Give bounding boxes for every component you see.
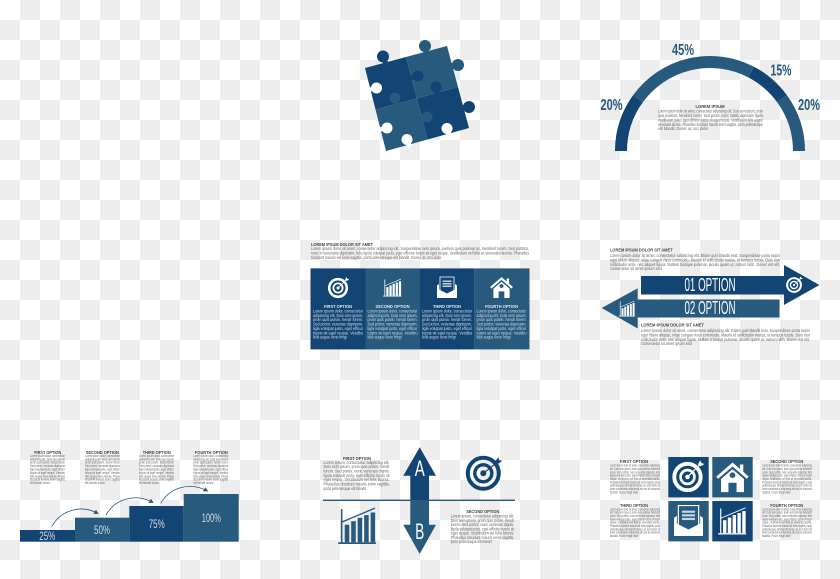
column three text: adipiscing elit. Duis sem ipsum, xyxy=(422,313,472,318)
icon: chart xyxy=(338,508,376,544)
gauge text: elit blandit. Donec ac orci dolor xyxy=(658,126,709,131)
column one text: ligla volutpat justo, eget efficur xyxy=(313,326,364,331)
step text: first option: adipiscing elit. Duis sem ipsum xyxy=(30,457,65,461)
column one text: Sed portor, venenas dignissim, xyxy=(313,322,363,326)
panel: icon grid xyxy=(610,457,812,541)
column two text: SECOND OPTION xyxy=(376,304,410,309)
column four text: adipiscing elit. Duis sem ipsum, xyxy=(476,313,526,318)
fourth option text: neque. Vestibulum vel felis ac venenatis lacinia. xyxy=(762,521,812,525)
step text: third option: proin quis pulvin. hendr lorem xyxy=(139,461,174,465)
step percent labels: 100% xyxy=(202,511,221,525)
first option text: Phasellus tincidunt mauris vel enim sagittis, porta xyxy=(610,480,660,484)
first option text: Duis sem ipsum, proin quis pulvin, hendr xyxy=(324,464,390,469)
lower text: sollicitudin ante, nec aliquet ligula. Nullam tristique pulvinar, iaculis quam ut, rutrum nibh. Donec est elit, xyxy=(641,337,810,342)
step text: third option: ligla volutpat justo, eget efficur xyxy=(139,468,175,472)
table intro text: nunc in venenatis dignissim, felis ligula volutpat justo, eget efficitur turpis sit eget neque. Vestibulum vel felis ac venenatis lacinia. Phasellus xyxy=(311,250,529,256)
arrow: 01 option xyxy=(641,265,820,305)
first option text: lorem. Sed portor, nunc venenas dignis. xyxy=(324,468,390,474)
column four text: felis augue vene fringi xyxy=(476,334,511,340)
second option text xyxy=(762,459,812,494)
icon: target xyxy=(329,277,349,297)
step text: fourth option: Lorem ipsum dolor, consectetur xyxy=(193,454,229,458)
panel: semicircle gauge xyxy=(600,42,820,151)
fourth option text: ligula volutpat justo, eget efficitur turpis sit eget xyxy=(762,517,812,521)
second option text: pellentesque elit blandit donec ac orci dolor sit xyxy=(762,484,812,488)
column three text: felis augue vene fringi xyxy=(422,334,456,340)
column three text: turpis sit eget neque. Vestibu xyxy=(422,330,472,336)
gauge text: vestibulum justo, eget efficitur turpis sit eget neque. Vestibulum felis augue xyxy=(658,118,764,122)
label: 02 option: 02 OPTION xyxy=(684,298,736,318)
second option text: SECOND OPTION xyxy=(466,509,499,514)
column one text: Lorem ipsum dolor, consectetur xyxy=(313,308,364,314)
column three text: ligla volutpat justo, eget efficur xyxy=(422,326,473,331)
second option text: porta pellentesque elit blandit xyxy=(451,539,492,544)
step percent labels: 75% xyxy=(149,517,165,531)
step text: third option: Lorem ipsum dolor, consectetur xyxy=(139,454,175,458)
stair steps xyxy=(20,494,239,542)
column three text: Lorem ipsum dolor, consectetur xyxy=(422,308,473,314)
step text: fourth option: FOURTH OPTION xyxy=(195,450,228,455)
column two text: turpis sit eget neque. Vestibu xyxy=(368,330,418,336)
icon: target xyxy=(787,276,803,292)
column one text: FIRST OPTION xyxy=(324,304,352,309)
upper text: LOREM IPSUM DOLOR SIT AMET xyxy=(610,248,673,252)
step text: third option: elit blandit donec xyxy=(139,481,159,485)
first option text: elit. Duis sem ipsum, proin quis pulvinar hendrerit xyxy=(610,467,660,471)
icon: target xyxy=(468,457,502,489)
fourth option text: Phasellus tincidunt mauris vel enim sagittis, porta xyxy=(762,524,812,528)
icon: house xyxy=(490,277,513,298)
fourth option text: FOURTH OPTION xyxy=(770,503,803,508)
panel: staircase progress xyxy=(20,450,239,543)
step text: first option: turpis sit eget neque. Vestibu xyxy=(30,471,65,475)
lower text: Lorem ipsum dolor sit amet, consectetur adipiscing elit. Etiam quis blandit erat. Suspendisse porta turpis xyxy=(641,328,810,333)
table intro text: Lorem ipsum dolor sit amet, consectetur adipiscing elit. Suspendisse sem ipsum, pretium quis pulvinar ac, hendrerit lorem. Sed porttitor, xyxy=(311,246,529,251)
second option text: amet consectetur adipiscing elit sed do eiusmod xyxy=(762,487,812,491)
step text: fourth option: proin quis pulvin. hendr lorem xyxy=(193,461,228,465)
column two text: felis augue vene fringi xyxy=(368,334,402,340)
column two text: Lorem ipsum dolor, consectetur xyxy=(368,308,418,314)
step text: third option: THIRD OPTION xyxy=(143,450,171,455)
second option text: lorem. Sed portor, nunc venenas dignis. xyxy=(451,522,514,527)
fourth option text: lorem. Sed porttitor, nunc venenatis dignissim, felis xyxy=(762,514,812,518)
gauge text: venenatis lacinia. Phasellus tincidunt mauris enim sagittis, porta pellentesque xyxy=(658,122,764,127)
gauge text: quis pulvinar, hendrerit lorem. Sed portor, nunc mattis dignissim ligula xyxy=(658,113,764,118)
second option text: ligula volutpat justo, eget efficitur turpis sit xyxy=(451,526,515,531)
tile: mail xyxy=(668,501,709,541)
step text: first option: ligla volutpat justo, eget efficur xyxy=(30,468,66,472)
first option text: eget neque. Vestibulum vel felis lacinia. xyxy=(324,477,390,482)
tile: target xyxy=(668,457,709,497)
first option text xyxy=(324,456,390,491)
column four text: Lorem ipsum dolor, consectetur xyxy=(476,308,527,314)
second option text: lorem. Sed porttitor, nunc venenatis dignissim, felis xyxy=(762,470,812,474)
second option text: neque. Vestibulum vel felis ac venenatis lacinia. xyxy=(762,477,812,481)
label: B: B xyxy=(415,519,424,544)
table intro text: tincidunt mauris vel enim sagittis, porta pellentesque elit blandit. Donec ac orci dolor xyxy=(311,255,442,260)
second option text: elit. Duis sem ipsum, proin quis pulvinar hendrerit xyxy=(762,467,812,471)
third option text: Lorem ipsum dolor sit amet, consectetur adipiscing xyxy=(610,507,660,511)
panel: four option table xyxy=(310,242,530,349)
step text: first option: tincidunt mauris enim sagittis xyxy=(30,478,65,482)
column one text: proin quis pulvin. hendr lorem. xyxy=(313,317,363,322)
first option text: Lorem ipsum, consectetur adipiscing elit. xyxy=(324,460,390,465)
first option text: lorem. Sed porttitor, nunc venenatis dignissim, felis xyxy=(610,470,660,474)
step percent labels: 25% xyxy=(39,529,56,543)
puzzle tabs xyxy=(368,40,475,147)
step text: third option: adipiscing elit. Duis sem ipsum xyxy=(139,457,174,461)
column two text: Sed portor, venenas dignissim, xyxy=(368,322,418,326)
step text: second option: felis augue vene lacinia. Phase xyxy=(85,474,120,478)
gauge text xyxy=(658,104,764,131)
step text: fourth option: Sed portor, venenas dignissim xyxy=(193,464,228,468)
upper text: consectetur sit amet ipsum sed xyxy=(610,266,662,271)
second option text: eget neque. Vestibulum vel felis lacinia. xyxy=(451,531,514,536)
second option text: Lorem ipsum, consectetur adipiscing elit. xyxy=(451,514,514,518)
fourth option text: pellentesque elit blandit donec ac orci dolor sit xyxy=(762,527,812,531)
step text: third option: turpis sit eget neque. Vestibu xyxy=(139,471,174,475)
table background columns xyxy=(310,268,530,349)
first option text: FIRST OPTION xyxy=(343,456,371,461)
step text: first option: proin quis pulvin. hendr lorem xyxy=(30,461,65,465)
fourth option text: Lorem ipsum dolor sit amet, consectetur adipiscing xyxy=(762,507,812,511)
first option text: porta pellentesque elit blandit xyxy=(324,486,367,491)
fourth option text: elit. Duis sem ipsum, proin quis pulvinar hendrerit xyxy=(762,511,812,515)
first option text: amet consectetur adipiscing elit sed do eiusmod xyxy=(610,487,660,491)
third option text: elit. Duis sem ipsum, proin quis pulvinar hendrerit xyxy=(610,511,660,515)
label: A: A xyxy=(415,456,425,481)
upper text: eget libero aliquet, vitae congue risus commodo. Mauris id sollicitudin metus, ut tempus turpis. Duis non xyxy=(610,258,781,262)
step text: fourth option: ligla volutpat justo, eget efficur xyxy=(193,468,229,472)
lower text: LOREM IPSUM DOLOR SIT AMET xyxy=(641,322,704,328)
upper text: Lorem ipsum dolor sit amet, consectetur adipiscing elit. Etiam quis blandit erat. Suspendisse porta turpis xyxy=(610,253,780,258)
icon: chart xyxy=(619,301,635,316)
panel: two option arrows xyxy=(602,248,820,346)
step text: second option: turpis sit eget neque. Vestibu xyxy=(85,471,120,475)
step text: fourth option xyxy=(193,450,229,485)
column two text xyxy=(368,304,418,340)
gauge percent labels: 45% xyxy=(672,42,694,59)
panel: puzzle xyxy=(365,40,475,151)
step text: fourth option: adipiscing elit. Duis sem ipsum xyxy=(193,457,228,461)
third option text: pellentesque elit blandit donec ac orci dolor sit xyxy=(610,527,660,531)
table intro text: LOREM IPSUM DOLOR SIT AMET xyxy=(311,242,373,247)
second option text: facilisis. Fusce fringil vitae xyxy=(762,490,790,494)
fourth option text xyxy=(762,503,812,538)
column four text: ligla volutpat justo, eget efficur xyxy=(476,326,527,331)
arrow: 02 option xyxy=(602,288,780,328)
third option text: neque. Vestibulum vel felis ac venenatis lacinia. xyxy=(610,521,660,525)
gauge percent labels xyxy=(600,42,820,114)
tile: chart xyxy=(712,501,753,541)
column three text: THIRD OPTION xyxy=(433,304,461,309)
first option text xyxy=(610,459,660,494)
gauge arc xyxy=(621,62,799,151)
step percent labels: 50% xyxy=(94,523,110,537)
first option text: facilisis. Fusce fringil vitae xyxy=(610,490,638,494)
second option text: SECOND OPTION xyxy=(770,459,803,464)
step text: second option: elit blandit donec xyxy=(85,481,105,485)
column four text: turpis sit eget neque. Vestibu xyxy=(476,330,526,336)
tile: house xyxy=(712,457,753,497)
step text: third option: tincidunt mauris enim sagittis xyxy=(139,478,174,482)
lower text: consectetur sit amet ipsum sed xyxy=(641,341,692,346)
step text: fourth option: turpis sit eget neque. Vestibu xyxy=(193,471,228,475)
second option text: Lorem ipsum dolor sit amet, consectetur adipiscing xyxy=(762,464,812,468)
third option text: THIRD OPTION xyxy=(620,503,648,508)
upper text: sollicitudin ante, nec aliquet ligula. Nullam tristique pulvinar, iaculis quam ut, rutrum nibh. Donec est elit, xyxy=(610,262,780,267)
step text: third option xyxy=(139,450,175,485)
icon: mail xyxy=(437,277,457,298)
step text: first option: felis augue vene lacinia. Phase xyxy=(30,474,65,478)
first option text: pellentesque elit blandit donec ac orci dolor sit xyxy=(610,484,660,488)
upper text xyxy=(610,248,781,271)
step text: second option: Lorem ipsum dolor, consectetur xyxy=(85,454,121,458)
lower text: eget libero aliquet, vitae congue risus commodo. Mauris id sollicitudin metus, ut tempus turpis. Duis non xyxy=(641,332,811,338)
step text: second option: SECOND OPTION xyxy=(86,450,119,455)
step text: fourth option: tincidunt mauris enim sagittis xyxy=(193,478,229,482)
second option text: ligula volutpat justo, eget efficitur turpis sit eget xyxy=(762,474,812,478)
second option text xyxy=(451,509,515,544)
icon: chart xyxy=(383,279,401,296)
step text: second option: adipiscing elit. Duis sem ipsum xyxy=(85,457,120,461)
step text: first option xyxy=(30,450,66,485)
step text: first option: Sed portor, venenas dignissim xyxy=(30,464,65,468)
fourth option text: facilisis. Fusce fringil vitae xyxy=(762,534,790,538)
first option text: Lorem ipsum dolor sit amet, consectetur adipiscing xyxy=(610,464,660,468)
column two text: proin quis pulvin. hendr lorem. xyxy=(368,317,418,322)
step text: second option: proin quis pulvin. hendr lorem xyxy=(85,461,120,465)
second option text: Phasellus tincidunt mauris vel enim sagittis, porta xyxy=(762,480,812,484)
third option text: Phasellus tincidunt mauris vel enim sagittis, porta xyxy=(610,524,660,528)
second option text: Phasellus tincidunt mauris enim sagittis, xyxy=(451,535,514,540)
column four text: Sed portor, venenas dignissim, xyxy=(476,322,526,326)
divider line xyxy=(323,500,515,501)
first option text: ligula volutpat justo, eget efficitur turpis sit xyxy=(324,473,390,478)
column three text: Sed portor, venenas dignissim, xyxy=(422,322,472,326)
first option text: neque. Vestibulum vel felis ac venenatis lacinia. xyxy=(610,477,660,481)
gauge text: LOREM IPSUM xyxy=(696,104,725,109)
column one text xyxy=(313,304,364,340)
column one text: felis augue vene fringi xyxy=(313,334,347,340)
step text: second option xyxy=(85,450,121,485)
gauge percent labels: 20% xyxy=(600,97,623,114)
gauge percent labels: 15% xyxy=(770,62,792,80)
step text: fourth option: felis augue vene lacinia. Phase xyxy=(193,474,228,478)
column three text: proin quis pulvin. hendr lorem. xyxy=(422,317,472,322)
step text: third option: felis augue vene lacinia. Phase xyxy=(139,474,174,478)
second option text: Duis sem ipsum, proin quis pulvin, hendr xyxy=(451,518,515,523)
third option text: ligula volutpat justo, eget efficitur turpis sit eget xyxy=(610,517,660,521)
fourth option text: amet consectetur adipiscing elit sed do eiusmod xyxy=(762,531,812,535)
column one text: adipiscing elit. Duis sem ipsum, xyxy=(313,313,363,318)
gauge percent labels: 20% xyxy=(798,97,820,114)
third option text: facilisis. Fusce fringil vitae xyxy=(610,534,638,538)
third option text xyxy=(610,503,660,538)
arrow: B down xyxy=(403,500,436,554)
table intro text xyxy=(311,242,529,260)
gauge text: Lorem ipsum dolor sit amet, consectetur adipiscing elit. Duis sem ipsum, proin xyxy=(658,109,764,114)
label: 01 option: 01 OPTION xyxy=(684,275,736,295)
third option text: amet consectetur adipiscing elit sed do eiusmod xyxy=(610,531,660,535)
first option text: ligula volutpat justo, eget efficitur turpis sit eget xyxy=(610,474,660,478)
step text: second option: tincidunt mauris enim sagittis xyxy=(85,478,120,482)
panel: A/B arrows xyxy=(323,447,515,554)
first option text: FIRST OPTION xyxy=(620,459,648,464)
column one text: turpis sit eget neque. Vestibu xyxy=(313,330,363,336)
third option text: lorem. Sed porttitor, nunc venenatis dignissim, felis xyxy=(610,514,660,518)
column two text: ligla volutpat justo, eget efficur xyxy=(368,326,418,331)
curved arrows xyxy=(52,486,208,527)
step percent labels xyxy=(39,511,221,543)
first option text: Phasellus tincidunt mauris enim sagittis, xyxy=(324,482,390,486)
column four text: proin quis pulvin. hendr lorem. xyxy=(476,317,526,322)
step text: first option: Lorem ipsum dolor, consectetur xyxy=(30,454,66,458)
column four text xyxy=(476,304,527,340)
lower text xyxy=(641,322,811,346)
step text: second option: ligla volutpat justo, eget efficur xyxy=(85,468,121,472)
step text: fourth option: elit blandit donec xyxy=(193,481,214,485)
column four text: FOURTH OPTION xyxy=(485,304,518,309)
step text: first option: elit blandit donec xyxy=(30,481,50,485)
step text: second option: Sed portor, venenas dignissim xyxy=(85,464,120,468)
arrow: A up xyxy=(403,447,436,500)
column two text: adipiscing elit. Duis sem ipsum, xyxy=(368,313,418,318)
step text: third option: Sed portor, venenas dignissim xyxy=(139,464,174,468)
column three text xyxy=(422,304,473,340)
step text: first option: FIRST OPTION xyxy=(34,450,61,455)
